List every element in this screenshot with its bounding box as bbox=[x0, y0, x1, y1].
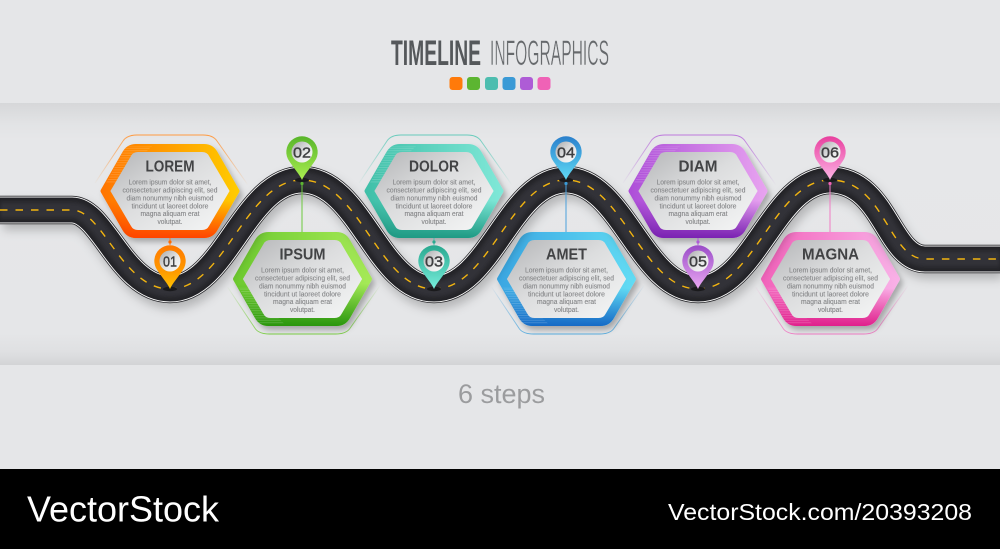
pin 02: 02 bbox=[293, 144, 311, 162]
panel: dolor: diam nonummy nibh euismod bbox=[390, 193, 478, 202]
panel: ipsum: volutpat. bbox=[290, 305, 315, 314]
panel: lorem: consectetuer adipiscing elit, sed bbox=[122, 185, 218, 194]
panel: magna: consectetuer adipiscing elit, sed bbox=[783, 273, 878, 282]
panel: ipsum: IPSUM bbox=[280, 246, 326, 264]
panel: diam: tincidunt ut laoreet dolore bbox=[660, 201, 736, 210]
panel: ipsum: diam nonummy nibh euismod bbox=[259, 281, 346, 290]
panel: lorem: diam nonummy nibh euismod bbox=[126, 193, 214, 202]
panel: dolor: consectetuer adipiscing elit, sed bbox=[386, 185, 482, 194]
panel: ipsum: Lorem ipsum dolor sit amet, bbox=[261, 266, 344, 275]
panel: diam: magna aliquam erat bbox=[668, 209, 728, 218]
panel: lorem bbox=[95, 135, 248, 238]
panel: dolor: DOLOR bbox=[409, 158, 459, 176]
panel: amet bbox=[492, 232, 644, 334]
panel: amet: volutpat. bbox=[554, 305, 579, 314]
panel: diam: DIAM bbox=[678, 158, 718, 176]
panel: lorem: LOREM bbox=[146, 158, 194, 176]
pin 06 bbox=[814, 136, 846, 232]
panel: magna: magna aliquam erat bbox=[801, 297, 861, 306]
panel: amet: magna aliquam erat bbox=[537, 297, 597, 306]
pin 01 bbox=[154, 238, 186, 291]
pin 05 bbox=[682, 238, 714, 291]
pin 02 bbox=[286, 136, 318, 232]
pin 04 bbox=[550, 136, 582, 232]
pin 03: 03 bbox=[425, 254, 443, 270]
panel: magna bbox=[756, 232, 908, 334]
footer bar: VectorStock.com/20393208 bbox=[668, 499, 972, 525]
footer bar bbox=[0, 469, 1000, 549]
title: TIMELINE bbox=[391, 34, 481, 73]
panel: diam: diam nonummy nibh euismod bbox=[654, 193, 742, 202]
panel: dolor: tincidunt ut laoreet dolore bbox=[396, 201, 472, 210]
pin 06: 06 bbox=[821, 144, 839, 162]
pin 03 bbox=[418, 238, 450, 291]
panel: lorem: volutpat. bbox=[158, 217, 182, 226]
panel: amet: consectetuer adipiscing elit, sed bbox=[519, 273, 614, 282]
panel: diam bbox=[623, 135, 776, 238]
panel: magna: diam nonummy nibh euismod bbox=[787, 281, 874, 290]
winding road bbox=[0, 180, 1000, 295]
panel: amet: AMET bbox=[546, 246, 587, 264]
pin 04: 04 bbox=[557, 144, 575, 162]
panel: ipsum bbox=[228, 232, 380, 334]
panel: ipsum: consectetuer adipiscing elit, sed bbox=[255, 273, 350, 282]
subtitle: 6 steps: 6 steps bbox=[458, 379, 545, 409]
panel: amet: diam nonummy nibh euismod bbox=[523, 281, 610, 290]
infographic canvas: INFOGRAPHICS bbox=[490, 34, 609, 73]
panel: lorem: tincidunt ut laoreet dolore bbox=[132, 201, 208, 210]
background band bbox=[0, 103, 1000, 365]
panel: magna: MAGNA bbox=[802, 246, 859, 264]
panel: diam: Lorem ipsum dolor sit amet, bbox=[656, 178, 740, 187]
panel: dolor bbox=[359, 135, 512, 238]
pin 01: 01 bbox=[163, 254, 177, 270]
panel: lorem: Lorem ipsum dolor sit amet, bbox=[128, 178, 212, 187]
colour swatches bbox=[450, 77, 550, 90]
panel: dolor: magna aliquam erat bbox=[404, 209, 464, 218]
panel: dolor: volutpat. bbox=[422, 217, 446, 226]
panel: magna: Lorem ipsum dolor sit amet, bbox=[789, 266, 872, 275]
panel: magna: tincidunt ut laoreet dolore bbox=[792, 289, 869, 298]
panel: amet: Lorem ipsum dolor sit amet, bbox=[525, 266, 608, 275]
panel: magna: volutpat. bbox=[818, 305, 843, 314]
panel: ipsum: magna aliquam erat bbox=[273, 297, 333, 306]
panel: amet: tincidunt ut laoreet dolore bbox=[528, 289, 605, 298]
panel: diam: consectetuer adipiscing elit, sed bbox=[650, 185, 746, 194]
pin 05: 05 bbox=[689, 254, 707, 270]
footer bar: VectorStock bbox=[27, 488, 220, 530]
panel: lorem: magna aliquam erat bbox=[140, 209, 200, 218]
panel: diam: volutpat. bbox=[686, 217, 710, 226]
panel: ipsum: tincidunt ut laoreet dolore bbox=[264, 289, 341, 298]
panel: dolor: Lorem ipsum dolor sit amet, bbox=[392, 178, 476, 187]
